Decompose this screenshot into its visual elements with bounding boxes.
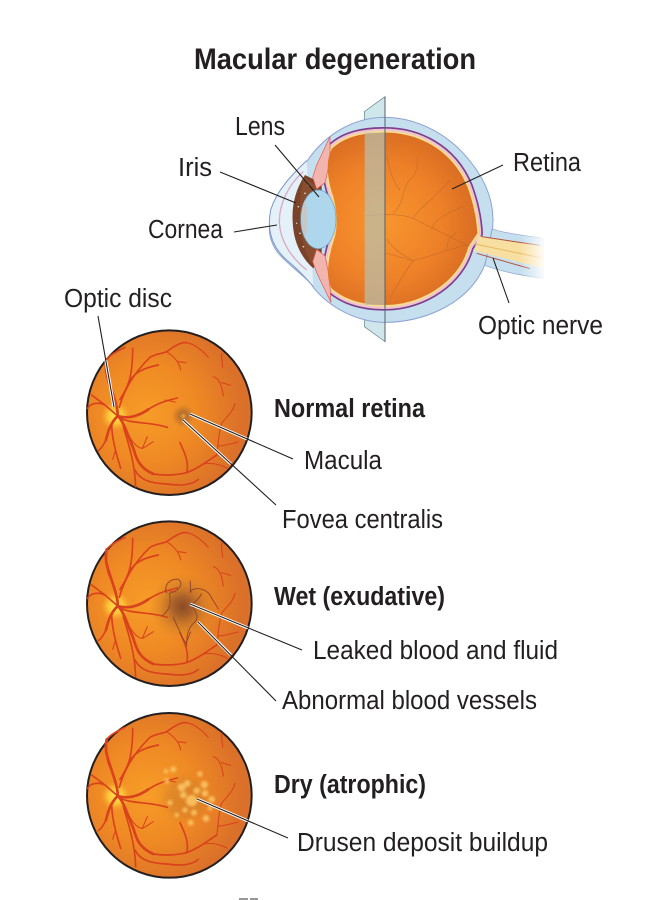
optic disc glow (100, 781, 131, 811)
label: Normal retina: Normal retina (274, 395, 426, 423)
eye label: Optic nerve: Optic nerve (478, 312, 603, 340)
vessels (88, 723, 238, 867)
leader halos (106, 360, 247, 464)
sclera outer (269, 117, 493, 322)
label: Macula (190, 414, 383, 475)
drusen deposits (164, 766, 215, 826)
cropped page mark (239, 898, 258, 900)
ciliary body top (313, 137, 330, 189)
fundus disc (87, 330, 252, 495)
ciliary body bottom (313, 249, 331, 303)
label: Wet (exudative): Wet (exudative) (274, 583, 445, 611)
optic disc glow (100, 401, 131, 431)
optic disc glow (100, 591, 131, 621)
optic nerve sheath (483, 223, 543, 278)
label: Fovea centralis: Fovea centralis (282, 506, 443, 534)
retina: dry (87, 713, 252, 878)
label: Dry (atrophic): Dry (atrophic) (274, 771, 426, 799)
veins on eye back (365, 157, 470, 298)
leader halos (190, 604, 248, 655)
label: Optic disc (64, 285, 172, 407)
optic nerve core (474, 232, 547, 282)
label: Fovea centralis (183, 420, 443, 534)
retina: normal (87, 330, 252, 495)
macula (171, 404, 195, 428)
cornea (269, 161, 313, 287)
abnormal vessels (162, 579, 218, 647)
title: Macular degeneration (194, 43, 476, 76)
lens (301, 190, 336, 249)
eye label: Retina: Retina (513, 149, 582, 177)
label: Optic disc: Optic disc (64, 285, 172, 313)
plane edge line (383, 97, 386, 342)
vessels (88, 533, 238, 677)
label: Drusen deposit buildup: Drusen deposit buildup (297, 829, 548, 857)
translucent plane front (365, 133, 385, 305)
label: Abnormal blood vessels (198, 622, 537, 715)
glass section plane back (364, 97, 385, 342)
eye label: Iris (178, 154, 296, 203)
label: Leaked blood and fluid: Leaked blood and fluid (313, 637, 558, 665)
label: Drusen deposit buildup (197, 799, 548, 857)
label: Abnormal blood vessels: Abnormal blood vessels (282, 687, 537, 715)
fundus disc (87, 521, 252, 686)
iris (292, 175, 322, 268)
label: Macula: Macula (304, 447, 383, 475)
choroid and retina layers (328, 133, 477, 305)
leaked fluid stain (149, 573, 216, 640)
eye label: Retina (452, 149, 582, 189)
eye cross-section diagram (269, 97, 547, 342)
label: Leaked blood and fluid (190, 604, 558, 665)
eye label: Lens (235, 113, 319, 197)
fundus disc (87, 713, 252, 878)
eye label: Optic nerve (478, 258, 603, 340)
leader halo (197, 799, 248, 821)
eye label: Iris: Iris (178, 154, 212, 182)
retina: wet (87, 521, 252, 686)
vitreous body (328, 133, 477, 305)
eye label: Cornea: Cornea (148, 216, 224, 244)
brown stain (164, 778, 206, 819)
vessels (88, 343, 238, 487)
eye label: Cornea (148, 216, 277, 244)
eye label: Lens: Lens (235, 113, 285, 141)
